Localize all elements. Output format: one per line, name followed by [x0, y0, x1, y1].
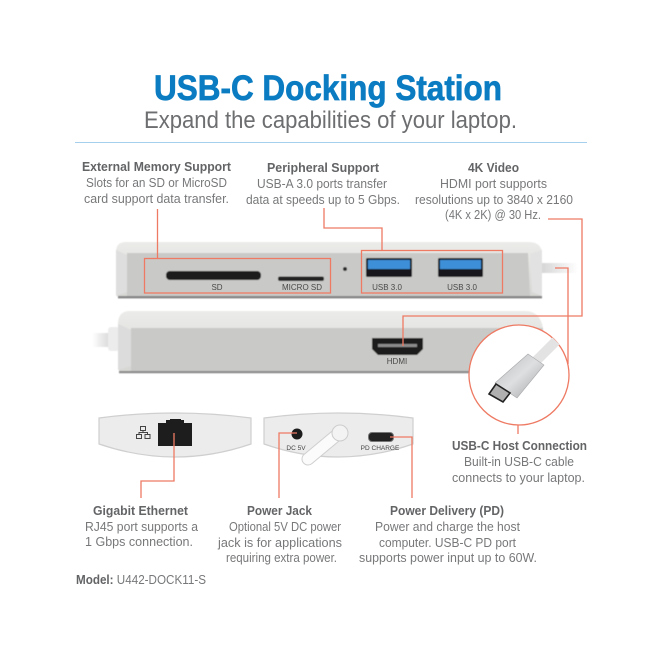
top device: card and USB side — [116, 242, 578, 298]
text block: gigabit ethernet: RJ45 port supports a — [85, 519, 199, 534]
text block: 4K video: (4K x 2K) @ 30 Hz. — [445, 207, 541, 222]
port labels: top device: USB 3.0 — [447, 283, 477, 292]
port labels: top device: USB 3.0 — [372, 283, 402, 292]
text block: power delivery: supports power input up to 60W. — [359, 550, 537, 565]
title: USB-C Docking Station — [154, 69, 502, 108]
USB port 2 — [438, 258, 483, 277]
USB-C metal tip — [489, 384, 510, 402]
HDMI port — [372, 338, 423, 355]
text block: power jack: requiring extra power. — [226, 550, 337, 565]
connector: power delivery — [390, 437, 412, 498]
highlight: SD slots — [144, 258, 330, 293]
text block: power delivery: computer. USB-C PD port — [379, 535, 516, 550]
text block: external memory support: External Memory Support — [82, 159, 232, 174]
port labels: power view: PD CHARGE — [361, 445, 400, 452]
USB-C cable — [535, 341, 556, 362]
text block: USB-C host connection: Built-in USB-C cable — [464, 454, 574, 469]
text block: 4K video: 4K Video — [468, 160, 519, 175]
text block: power delivery: Power and charge the host — [375, 519, 520, 534]
text block: 4K video — [415, 160, 573, 222]
RJ45 port — [158, 419, 192, 446]
text block: power jack: Optional 5V DC power — [229, 519, 342, 534]
connector: memory support — [156, 209, 158, 258]
HDMI label: HDMI — [387, 357, 407, 366]
text block: peripheral support: USB-A 3.0 ports transfer — [257, 176, 388, 191]
highlight: USB ports — [362, 250, 502, 293]
text block: power jack: jack is for applications — [217, 535, 342, 550]
text block: external memory support: Slots for an SD or MicroSD — [86, 175, 227, 190]
LED — [343, 267, 347, 271]
text block: 4K video: HDMI port supports — [440, 176, 547, 191]
connector: power jack — [279, 433, 297, 498]
text block: power delivery — [359, 503, 537, 565]
text block: power jack — [217, 503, 342, 565]
panel: power end view — [264, 413, 413, 459]
text block: USB-C host connection — [452, 438, 587, 485]
SD slot — [166, 271, 261, 280]
text block: power jack: Power Jack — [247, 503, 313, 518]
text block: peripheral support — [246, 160, 400, 207]
connector: 4K video — [403, 219, 582, 346]
text block: gigabit ethernet: 1 Gbps connection. — [85, 534, 193, 549]
port labels: top device: MICRO SD — [282, 283, 322, 292]
text block: external memory support — [82, 159, 232, 206]
port labels: power view — [286, 445, 400, 452]
callout: USB-C connector detail — [469, 325, 569, 425]
panel: ethernet end view — [99, 413, 251, 457]
subtitle: Expand the capabilities of your laptop. — [144, 107, 517, 134]
DC jack — [292, 428, 302, 440]
model number: Model: U442-DOCK11-S — [76, 573, 206, 587]
text block: gigabit ethernet — [85, 503, 199, 549]
port labels: top device: SD — [211, 283, 223, 292]
text block: USB-C host connection: connects to your laptop. — [452, 470, 585, 485]
connector: ethernet — [141, 433, 174, 498]
USB port 1 — [366, 258, 412, 277]
text block: peripheral support: data at speeds up to 5 Gbps. — [246, 192, 400, 207]
text block: gigabit ethernet: Gigabit Ethernet — [93, 503, 189, 518]
text block: external memory support: card support data transfer. — [84, 191, 229, 206]
text block: USB-C host connection: USB-C Host Connection — [452, 438, 587, 453]
PD charge port — [368, 432, 394, 442]
connector: host text — [517, 425, 519, 434]
connector: USB-C host — [555, 268, 568, 364]
text block: peripheral support: Peripheral Support — [267, 160, 380, 175]
micro SD slot — [278, 276, 324, 281]
icon: network — [136, 426, 150, 438]
port labels: top device — [211, 283, 477, 292]
text block: 4K video: resolutions up to 3840 x 2160 — [415, 192, 573, 207]
text block: power delivery: Power Delivery (PD) — [390, 503, 504, 518]
port labels: power view: DC 5V — [286, 445, 306, 452]
USB-C housing — [495, 354, 544, 398]
bottom device: HDMI side — [92, 311, 543, 373]
DC power cable — [308, 425, 348, 459]
connector: peripheral support — [324, 208, 382, 250]
